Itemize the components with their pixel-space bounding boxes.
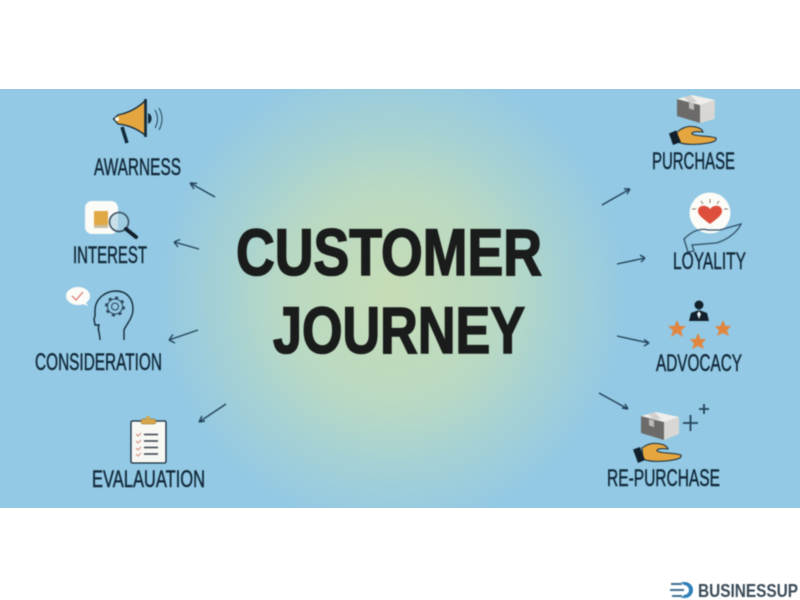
stage: evaluation [92, 416, 205, 493]
icon: clipboard [131, 416, 166, 463]
icon: box on hand [669, 95, 716, 145]
title [236, 215, 542, 367]
arrow: to awareness [190, 183, 215, 197]
stage: consideration [35, 287, 162, 376]
label: loyalty: LOYALITY [673, 248, 746, 275]
arrow: to consideration [169, 330, 198, 343]
arrow: to evaluation [199, 404, 226, 422]
arrow: to interest [174, 240, 199, 249]
stage: awareness [94, 99, 181, 181]
stage: loyalty [673, 192, 746, 275]
icon: magnifier [85, 201, 136, 237]
stage: advocacy [656, 300, 742, 377]
icon: box, hand and plus signs [633, 404, 709, 463]
arrow: to re-purchase [599, 393, 628, 409]
stage: re-purchase [607, 404, 720, 492]
icon: heart in hand [684, 192, 741, 252]
title: JOURNEY [273, 293, 525, 367]
label: re-purchase: RE-PURCHASE [607, 465, 720, 492]
label: purchase: PURCHASE [652, 148, 735, 175]
arrow: to advocacy [617, 336, 649, 346]
label: interest: INTEREST [73, 242, 147, 269]
arrow: to purchase [602, 189, 630, 205]
label: evaluation: EVALAUATION [92, 466, 205, 493]
title: CUSTOMER [236, 215, 542, 289]
stage: purchase [652, 95, 735, 175]
icon: person and stars [668, 300, 731, 349]
label: consideration: CONSIDERATION [35, 349, 162, 376]
arrow: to loyalty [617, 255, 645, 264]
stage: interest [73, 201, 147, 269]
icon: head with gear [66, 287, 133, 340]
icon: megaphone [114, 99, 162, 143]
label: awareness: AWARNESS [94, 154, 181, 181]
label: advocacy: ADVOCACY [656, 350, 742, 377]
